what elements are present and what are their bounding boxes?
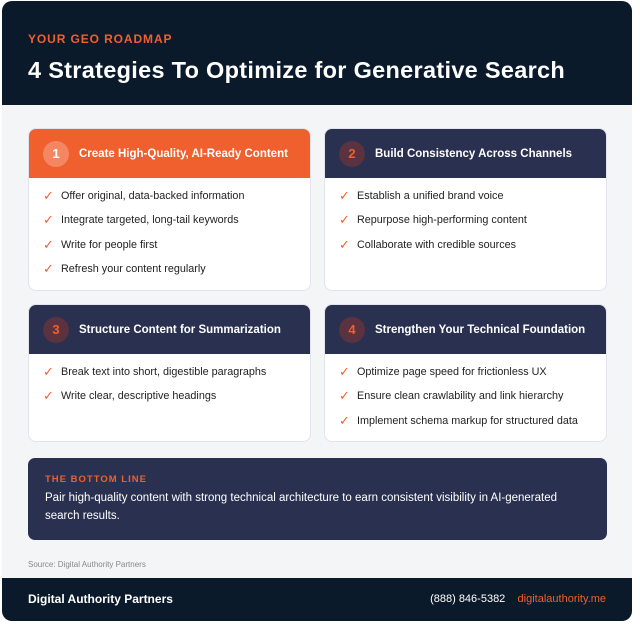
- footer brand: Digital Authority Partners: [28, 592, 173, 606]
- card 1 items: Offer original, data-backed information: [61, 190, 244, 202]
- card 4 items: [339, 364, 578, 428]
- card 2 items: ✓: [339, 188, 350, 203]
- card 1 header: 1: [52, 146, 60, 161]
- card 2 header: 2: [348, 146, 356, 161]
- title: 4 Strategies To Optimize for Generative Search: [28, 57, 565, 83]
- card 2 items: Establish a unified brand voice: [357, 190, 503, 202]
- card 4 items: Optimize page speed for frictionless UX: [357, 366, 547, 378]
- card 1 items: ✓: [43, 188, 54, 203]
- card 4 items: Implement schema markup for structured data: [357, 415, 578, 427]
- card 1 items: Integrate targeted, long-tail keywords: [61, 214, 239, 226]
- card 4 header: [325, 305, 606, 354]
- card 2 header: [325, 129, 606, 178]
- card 3 header: 3: [52, 322, 60, 337]
- footer: [2, 578, 632, 621]
- card 4 header: 4: [348, 322, 356, 337]
- card 4 header: Strengthen Your Technical Foundation: [375, 324, 585, 336]
- card 3 header: [29, 305, 310, 354]
- card 3 items: Break text into short, digestible paragraphs: [61, 366, 266, 378]
- card 4 items: Ensure clean crawlability and link hierarchy: [357, 390, 563, 402]
- card 4 items: ✓: [339, 364, 350, 379]
- card 1 items: Refresh your content regularly: [61, 263, 206, 275]
- kicker: YOUR GEO ROADMAP: [28, 32, 172, 46]
- card 3 items: ✓: [43, 364, 54, 379]
- card 3: [28, 304, 311, 442]
- card 4 items: ✓: [339, 388, 350, 403]
- card 2 header: Build Consistency Across Channels: [375, 148, 572, 160]
- card 2 items: [339, 188, 527, 252]
- source: Source: Digital Authority Partners: [28, 560, 146, 569]
- bottom line callout: [28, 458, 607, 540]
- callout kicker: THE BOTTOM LINE: [45, 474, 147, 485]
- card 2 items: Collaborate with credible sources: [357, 239, 516, 251]
- card 4: [324, 304, 607, 442]
- card 1 items: ✓: [43, 212, 54, 227]
- card 1 items: ✓: [43, 261, 54, 276]
- card 1 items: [43, 188, 244, 276]
- card 1 items: Write for people first: [61, 239, 157, 251]
- card 2 items: ✓: [339, 212, 350, 227]
- card 3 items: Write clear, descriptive headings: [61, 390, 216, 402]
- card 1: [28, 128, 311, 291]
- card 2 items: Repurpose high-performing content: [357, 214, 527, 226]
- footer contact: (888) 846-5382 digitalauthority.me: [430, 593, 606, 605]
- card 3 items: ✓: [43, 388, 54, 403]
- header: [2, 1, 632, 105]
- card 2 items: ✓: [339, 237, 350, 252]
- card 2: [324, 128, 607, 291]
- card 1 items: ✓: [43, 237, 54, 252]
- card 1 header: [29, 129, 310, 178]
- card 4 items: ✓: [339, 413, 350, 428]
- card 3 items: [43, 364, 266, 403]
- callout text: Pair high-quality content with strong technical architecture to earn consistent visibility in AI-generated search results.: [45, 492, 557, 522]
- card 3 header: Structure Content for Summarization: [79, 324, 281, 336]
- card 1 header: Create High-Quality, AI-Ready Content: [79, 148, 288, 160]
